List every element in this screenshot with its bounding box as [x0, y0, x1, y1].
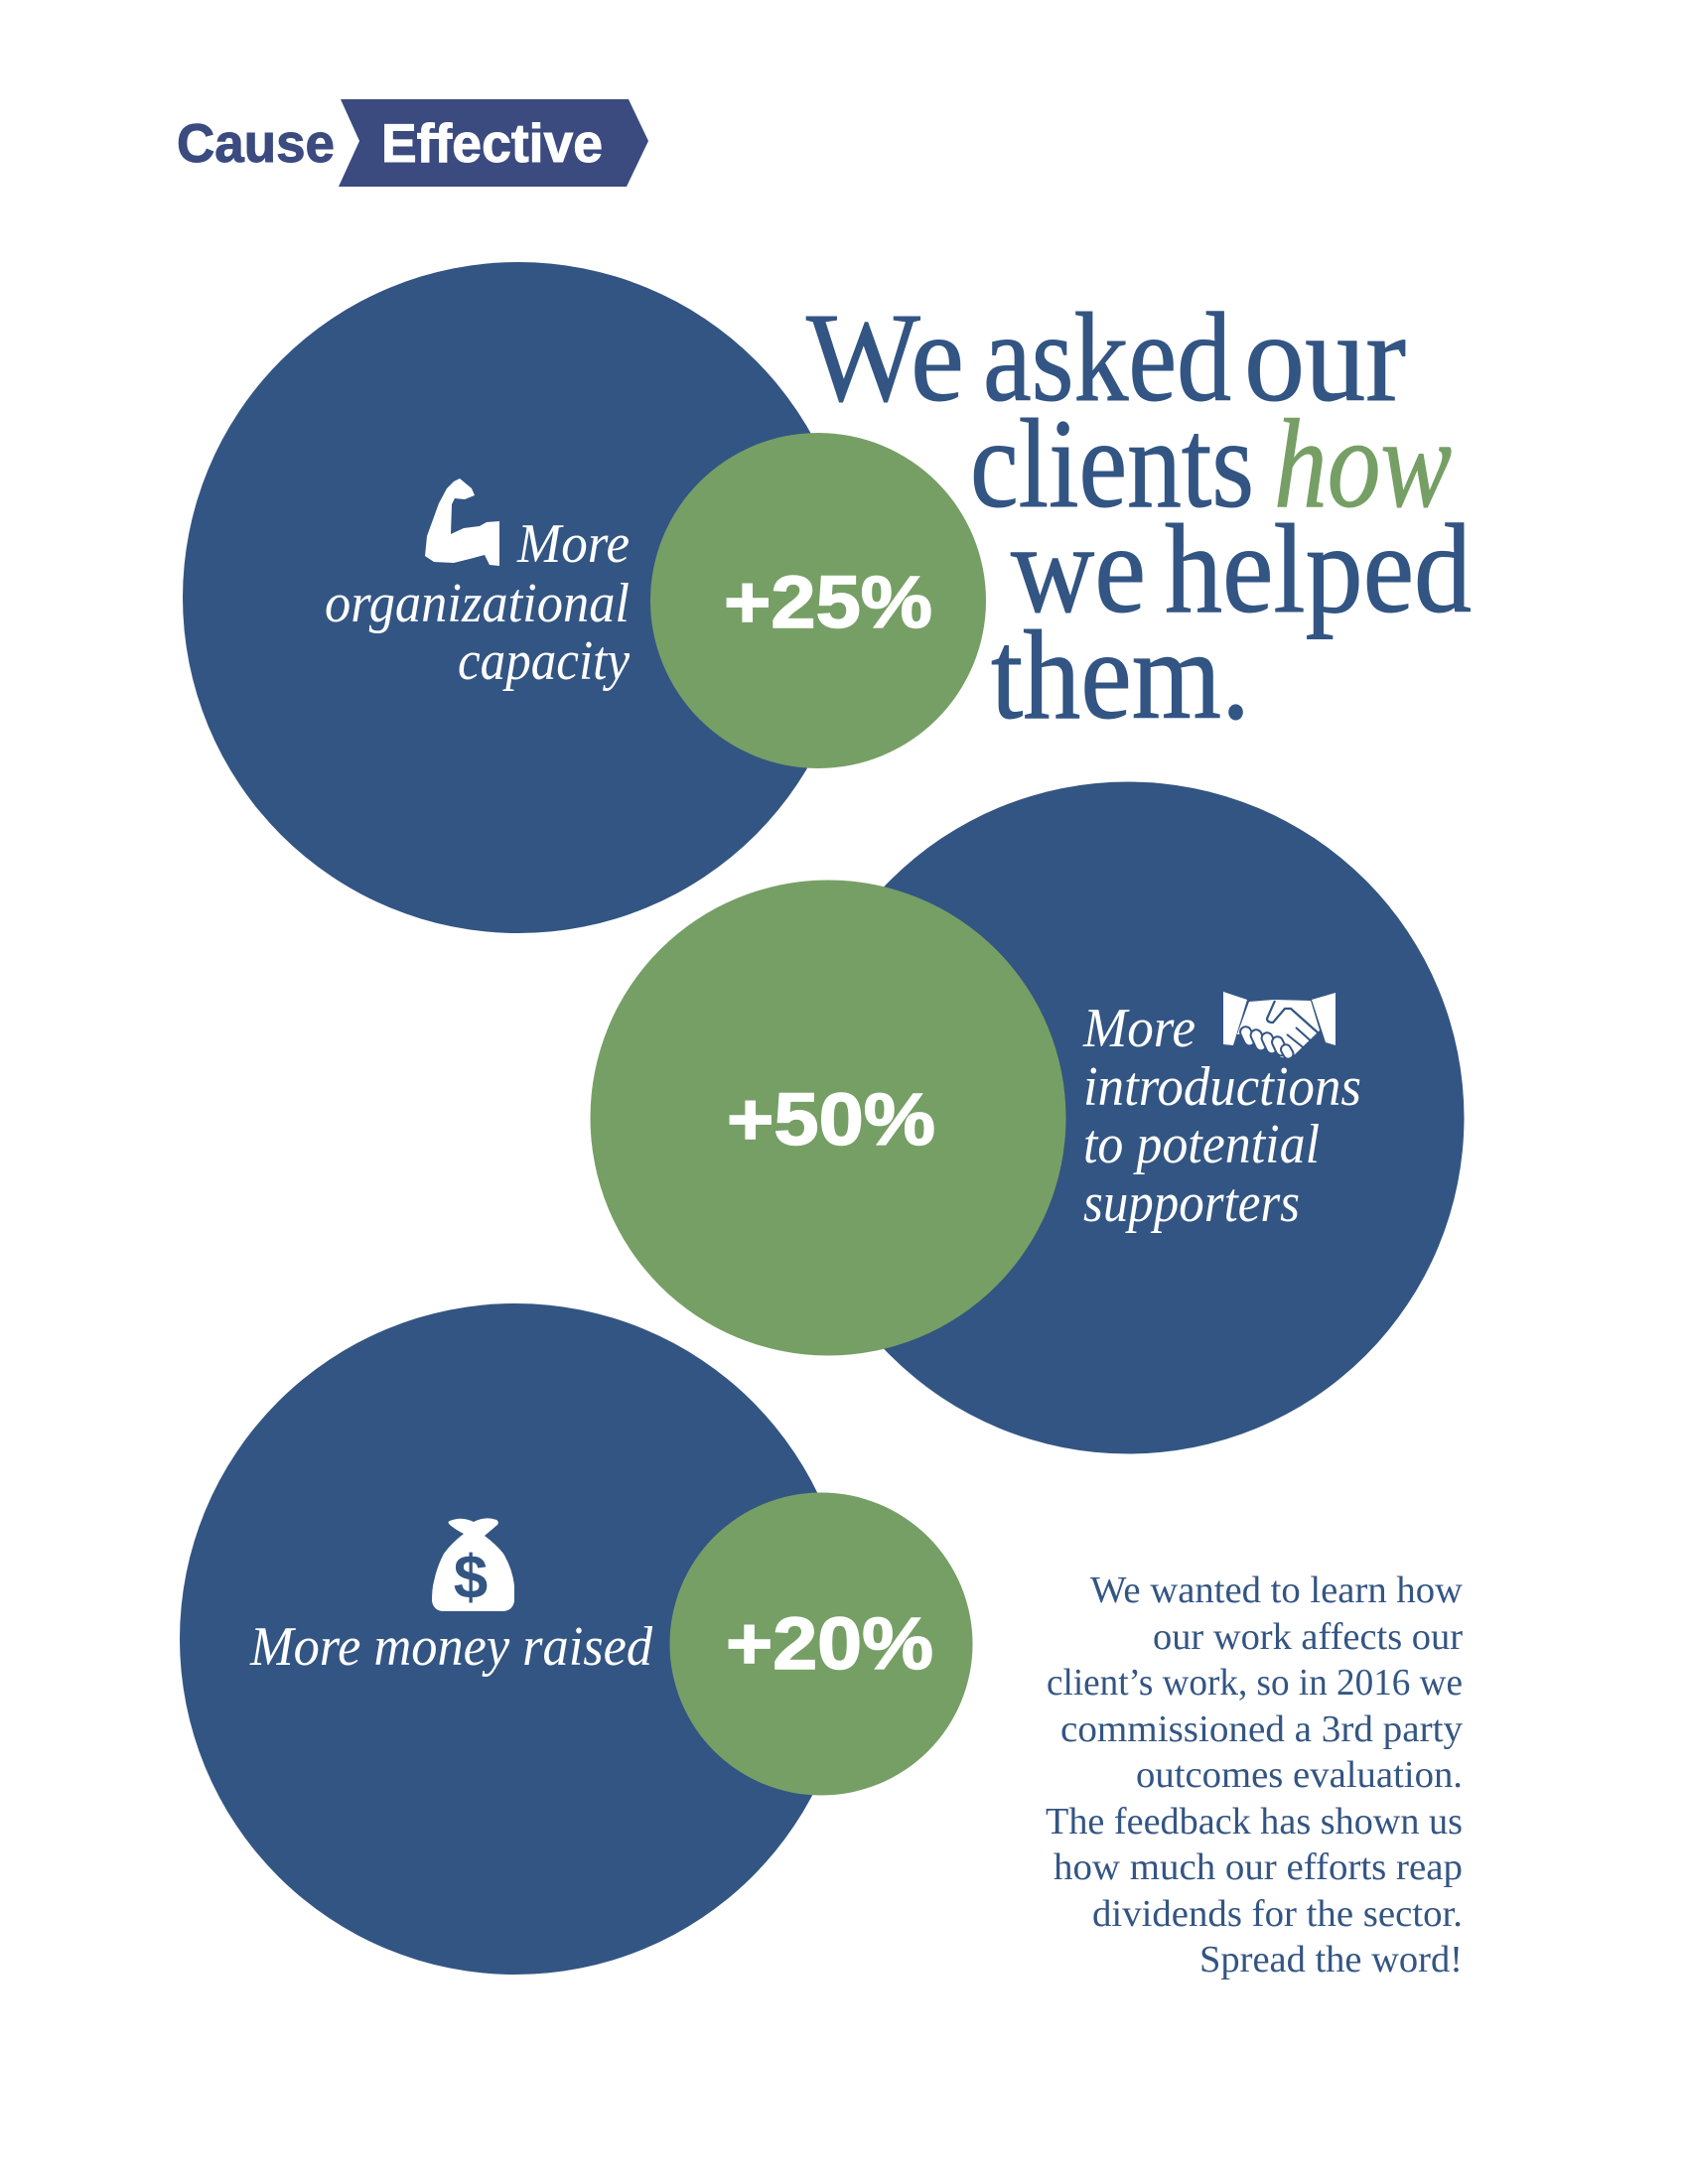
stat: +25%: +25% [724, 561, 932, 643]
logo word: Cause: Cause [177, 112, 335, 174]
panel: more money raised [180, 1303, 973, 1975]
logo arrow banner [339, 99, 648, 187]
green circle 2 [590, 880, 1066, 1356]
label: more introductions to potential supporters: to potential [1083, 1114, 1320, 1175]
text block: evaluation description: The feedback has shown us [1046, 1801, 1463, 1843]
text block: evaluation description: how much our efforts reap [1054, 1846, 1463, 1888]
heading: we [1011, 498, 1146, 639]
label: more introductions to potential supporters: More [1082, 998, 1196, 1059]
text block: evaluation description [1046, 1570, 1464, 1980]
label: more organizational capacity: organizational [325, 573, 630, 634]
panel: organizational capacity [183, 262, 986, 933]
label: more introductions to potential supporters: introductions [1083, 1056, 1361, 1118]
label: more introductions to potential supporters: supporters [1083, 1172, 1300, 1234]
label: more introductions to potential supporters [1082, 998, 1361, 1234]
heading emphasis: how: how [1274, 393, 1452, 534]
panel: introductions to potential supporters [590, 782, 1464, 1453]
text block: evaluation description: commissioned a 3rd party [1060, 1708, 1463, 1750]
heading: helped [1165, 498, 1472, 639]
label: more organizational capacity: More [516, 513, 630, 575]
heading: asked [983, 287, 1231, 428]
icon: flexed arm [425, 478, 499, 566]
icon: handshake [1223, 992, 1336, 1060]
label: more money raised: More money raised [249, 1616, 653, 1678]
blue circle 1 [183, 262, 854, 933]
stat: +20%: +20% [726, 1602, 933, 1685]
heading: We [806, 287, 964, 428]
label: more organizational capacity [325, 513, 630, 692]
stat: +50%: +50% [727, 1078, 935, 1160]
logo word: Effective: Effective [381, 112, 603, 174]
logo: Cause Effective [177, 99, 648, 187]
heading: our [1244, 287, 1406, 428]
text block: evaluation description: our work affects our [1153, 1616, 1463, 1658]
heading: them. [991, 605, 1250, 746]
green circle 3 [669, 1493, 973, 1795]
text block: evaluation description: We wanted to learn how [1090, 1570, 1464, 1611]
blue circle 2 [792, 782, 1464, 1453]
text block: evaluation description: Spread the word! [1199, 1939, 1463, 1980]
green circle 1 [650, 433, 986, 768]
icon: money bag: $ [454, 1544, 488, 1612]
text block: evaluation description: dividends for the sector. [1092, 1893, 1463, 1935]
text block: evaluation description: client’s work, so in 2016 we [1047, 1662, 1463, 1704]
icon: money bag [432, 1518, 514, 1612]
heading [806, 287, 1472, 746]
heading: clients [970, 393, 1254, 534]
label: more organizational capacity: capacity [458, 630, 630, 692]
blue circle 3 [180, 1303, 851, 1975]
text block: evaluation description: outcomes evaluation. [1136, 1754, 1463, 1796]
